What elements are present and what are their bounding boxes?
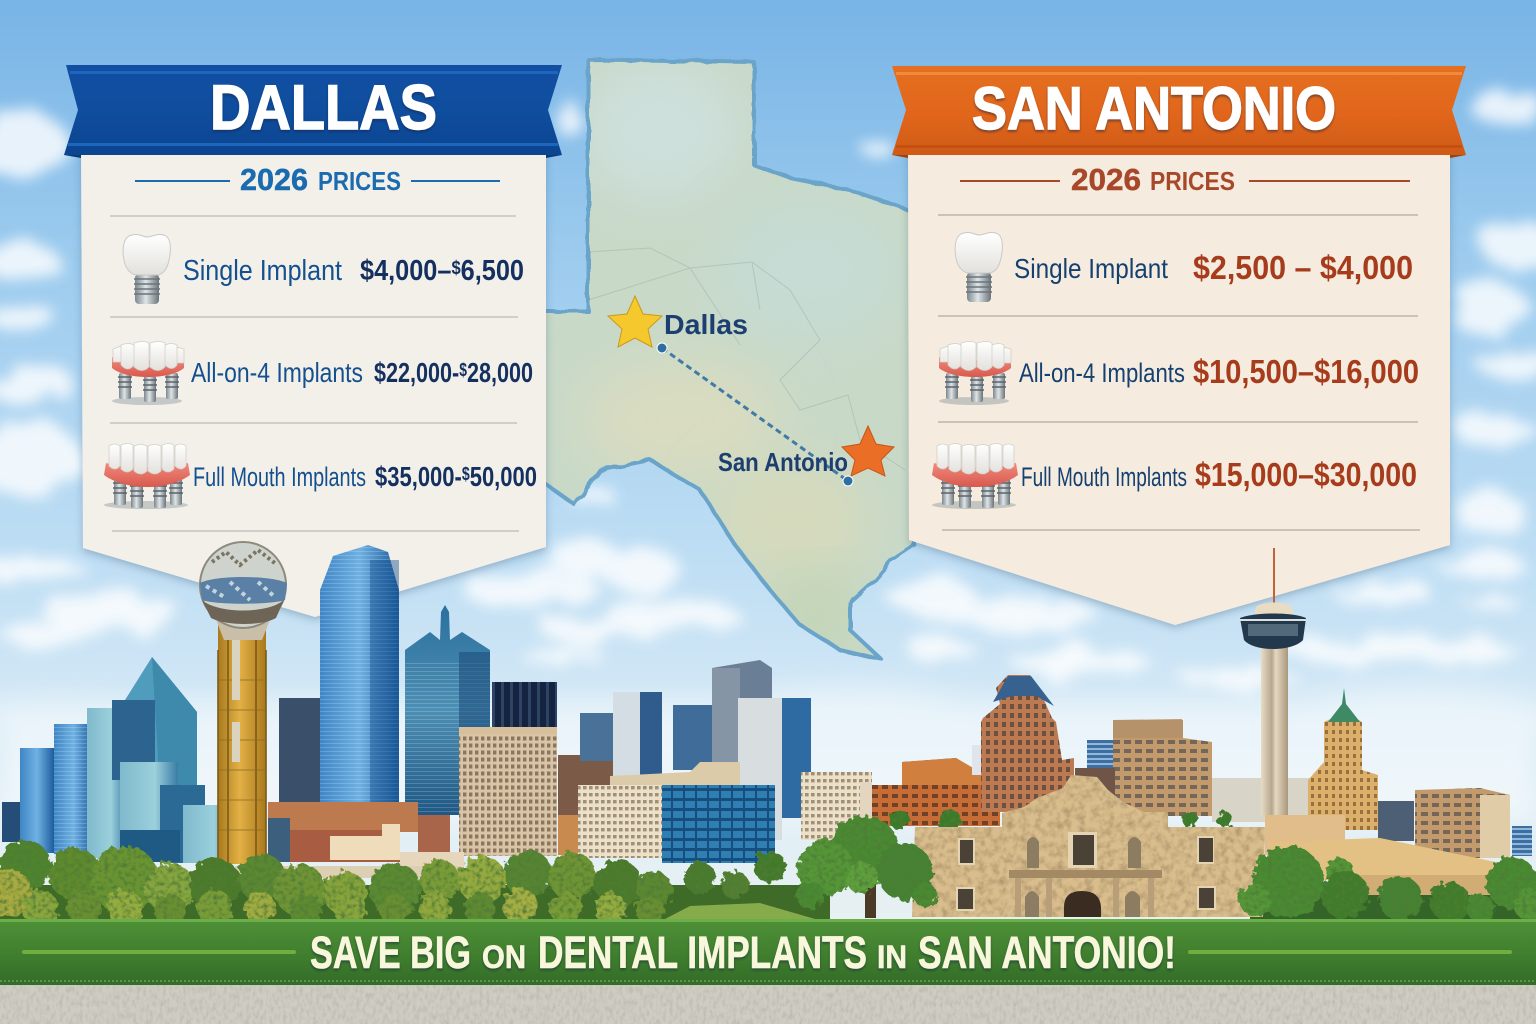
icon: full mouth [932, 444, 1018, 509]
heading: 2026 prices [135, 162, 500, 197]
row: full mouth implants: $ [462, 464, 470, 484]
row: all-on-4 implants [939, 342, 1419, 405]
row: all-on-4 implants [112, 342, 533, 405]
icon: single implant [955, 232, 1002, 302]
slogan text: IN [877, 939, 907, 975]
bottom banner [0, 919, 1536, 985]
Tower of the Americas [1240, 548, 1306, 815]
row: full mouth implants: $35,000- [375, 461, 486, 492]
row: full mouth implants: 50,000 [470, 461, 537, 492]
row: single implant: $2,500 – $4,000 [1193, 249, 1413, 286]
marker: San Antonio: San Antonio [718, 447, 848, 477]
icon: all-on-4 [112, 342, 184, 405]
row: single implant: $ [451, 258, 461, 279]
marker: Dallas: Dallas [664, 309, 748, 340]
row: single implant [123, 234, 524, 304]
banner: Dallas: DALLAS [210, 73, 437, 143]
heading: 2026 prices: PRICES [1150, 166, 1235, 196]
heading: 2026 prices: 2026 [1071, 162, 1141, 197]
row: all-on-4 implants: 28,000 [467, 357, 533, 388]
trees: background [0, 810, 1536, 926]
slogan text: DENTAL IMPLANTS [538, 927, 867, 978]
banner: San Antonio: SAN ANTONIO [972, 75, 1336, 142]
The Alamo [912, 775, 1265, 917]
row: single implant: 6,500 [461, 255, 524, 287]
slogan text [310, 927, 1176, 978]
icon: full mouth [104, 444, 190, 509]
banner: San Antonio [892, 66, 1466, 158]
marker: Dallas [608, 296, 748, 353]
icon: single implant [123, 234, 170, 304]
panel: Dallas prices [64, 65, 562, 617]
map of Texas [540, 60, 915, 660]
slogan text: ON [482, 939, 526, 975]
route line [662, 348, 848, 481]
slogan text: SAVE BIG [310, 927, 471, 978]
panel: San Antonio prices [892, 66, 1466, 625]
clouds [0, 89, 1536, 820]
row: all-on-4 implants: $10,500–$16,000 [1193, 353, 1419, 390]
banner: Dallas [64, 65, 562, 158]
row: single implant: $4,000– [360, 255, 465, 287]
trees: foreground [796, 816, 1536, 922]
row: full mouth implants [104, 444, 537, 509]
row: single implant [955, 232, 1413, 302]
row: all-on-4 implants: All-on-4 Implants [191, 357, 363, 388]
row: full mouth implants [932, 444, 1417, 509]
icon: all-on-4 [939, 342, 1011, 405]
heading: 2026 prices: 2026 [240, 162, 308, 197]
Dallas skyline [2, 542, 872, 878]
marker: San Antonio [718, 426, 894, 486]
row: full mouth implants: Full Mouth Implants [1021, 462, 1187, 492]
San Antonio skyline [860, 548, 1532, 895]
row: full mouth implants: Full Mouth Implants [193, 462, 366, 492]
row: all-on-4 implants: $22,000- [374, 357, 485, 388]
Bank of America Plaza tower [320, 545, 399, 808]
heading: 2026 prices: PRICES [318, 166, 401, 196]
row: single implant: Single Implant [183, 255, 342, 287]
row: all-on-4 implants: All-on-4 Implants [1019, 358, 1185, 388]
row: full mouth implants: $15,000–$30,000 [1195, 456, 1417, 493]
road strip [0, 983, 1536, 1024]
heading: 2026 prices [960, 162, 1410, 197]
slogan text: SAN ANTONIO! [918, 927, 1176, 978]
Reunion Tower [200, 542, 287, 864]
row: all-on-4 implants: $ [459, 360, 467, 380]
row: single implant: Single Implant [1014, 253, 1168, 284]
